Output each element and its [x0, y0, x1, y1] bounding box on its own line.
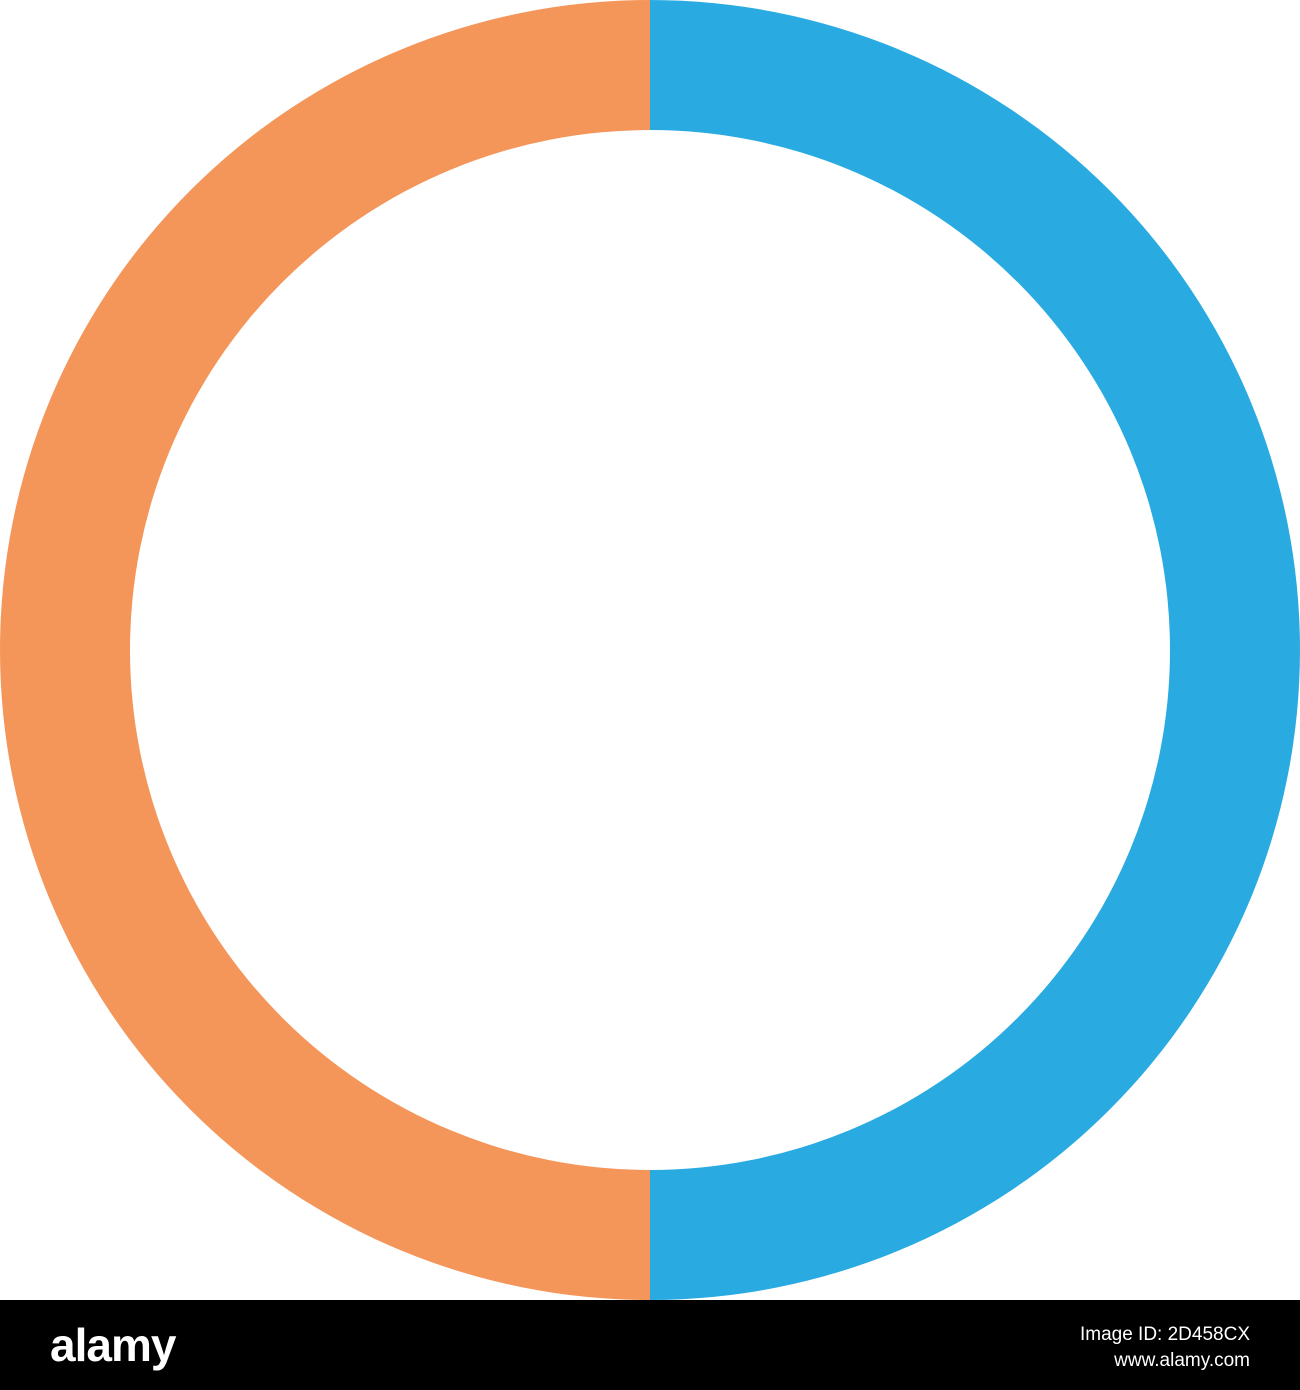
segment: orange left half: [0, 0, 650, 1300]
footer logo: alamy: [50, 1319, 175, 1371]
footer bar: [0, 1300, 1300, 1390]
segment: blue right half: [650, 0, 1300, 1300]
footer image id text: [1080, 1324, 1250, 1371]
footer image id text: Image ID: 2D458CX: [1080, 1324, 1250, 1345]
footer image id text: www.alamy.com: [1114, 1350, 1250, 1371]
